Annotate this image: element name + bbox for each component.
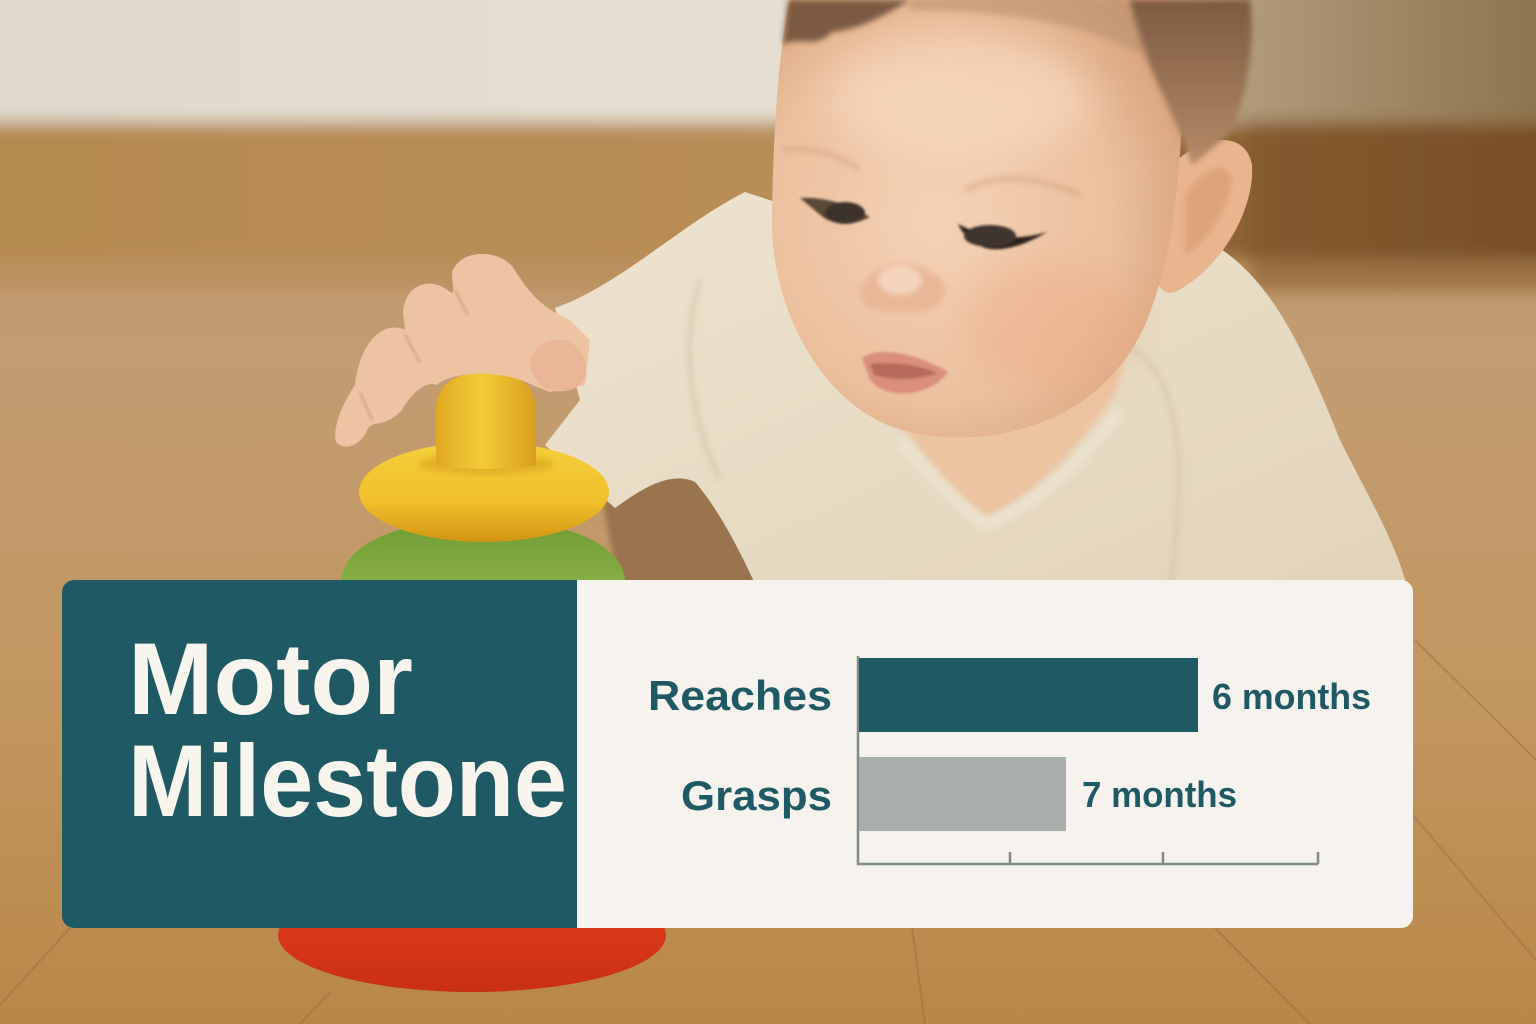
face [772,0,1185,437]
bar: grasps [681,757,1237,831]
sleeve folds [690,280,1178,590]
torso and sleeve [545,192,1408,590]
green ring [341,519,625,600]
brow [782,149,1080,195]
mouth [862,352,948,393]
baby hand [335,254,590,447]
icon: stacking ring toy [278,372,666,992]
panel: teal title background [62,580,577,928]
cheek blush [965,260,1135,390]
baby body in cream shirt [545,192,1408,590]
shadow gap under arm [600,470,770,590]
forehead light [830,40,1090,160]
right eye [958,224,1047,249]
title [128,622,567,838]
title: Motor [128,622,413,736]
bar: reaches: 6 months [1212,676,1371,717]
panel: light chart background [62,580,1413,928]
ear [1149,140,1252,293]
neckline [880,340,1130,518]
bar: reaches: Reaches [648,672,832,719]
nose [860,264,946,313]
yellow peg [436,372,536,469]
title: Milestone [128,724,567,838]
bar: grasps: Grasps [681,772,832,819]
yellow ring [359,442,609,542]
baby head [772,0,1252,437]
left eye [800,198,870,224]
hair [783,0,1252,165]
bar: grasps: 7 months [1082,774,1237,815]
bar: reaches [648,658,1371,732]
bar chart [648,656,1371,864]
axis [858,656,1318,864]
red base ring [278,878,666,992]
thumb [530,340,587,391]
